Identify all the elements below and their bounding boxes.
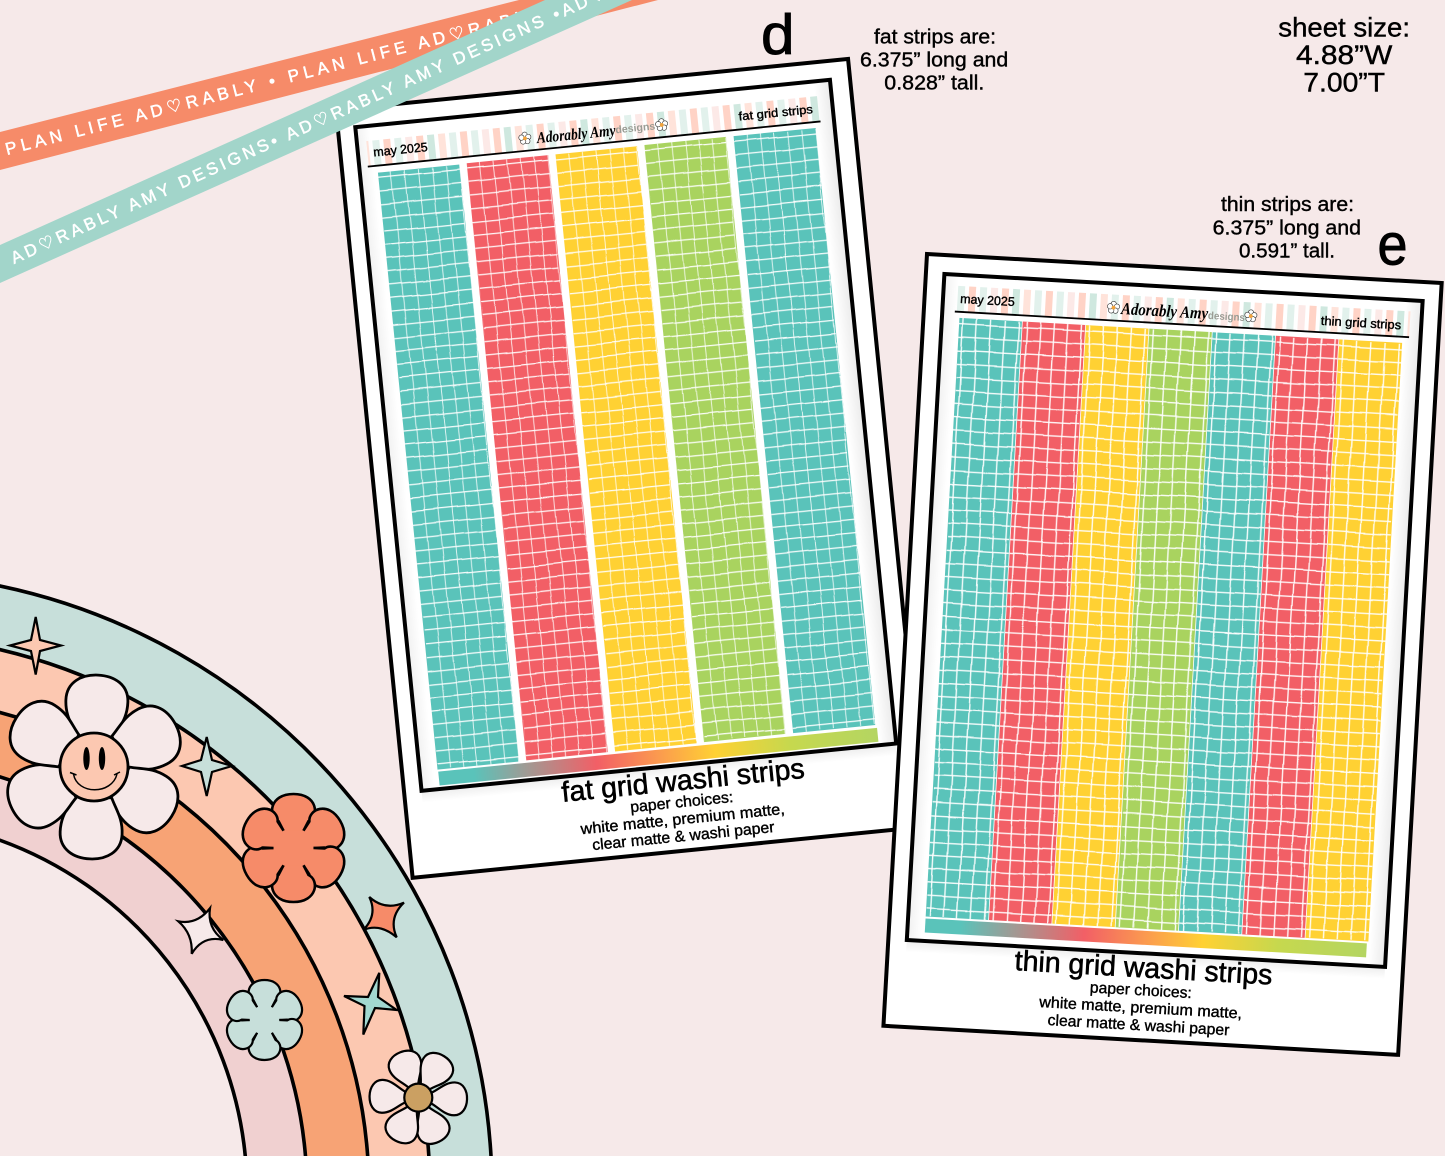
strip: teal bbox=[378, 165, 519, 770]
sheet e frame bbox=[907, 274, 1423, 967]
sheet d type label: fat grid strips bbox=[738, 102, 813, 124]
strip: green bbox=[644, 137, 786, 742]
sheet d header stripes bbox=[366, 96, 820, 166]
sheet e caption: thin grid washi strips bbox=[1014, 945, 1273, 992]
icon: smiley flower bbox=[0, 674, 190, 860]
sheet d caption: paper choices: bbox=[629, 789, 734, 816]
sheet size note bbox=[1278, 13, 1410, 98]
icon: peach sparkle bbox=[10, 617, 61, 674]
strip: yellow bbox=[555, 146, 697, 751]
sheet e month label: may 2025 bbox=[960, 292, 1015, 309]
strip: green bbox=[1116, 329, 1212, 931]
sheet d logo bbox=[518, 117, 669, 149]
sheet e logo bbox=[1107, 298, 1257, 326]
sheet e caption bbox=[1011, 945, 1273, 1042]
sheet e caption: paper choices: bbox=[1089, 979, 1192, 1002]
strip: red bbox=[467, 155, 608, 760]
sheet d logo: Adorably Amy bbox=[535, 122, 617, 147]
sheet d caption: white matte, premium matte, bbox=[579, 801, 786, 838]
fat strips note: 6.375” long and bbox=[860, 49, 1008, 72]
strip: red 2 bbox=[1242, 336, 1338, 938]
strip: yellow 1 bbox=[1052, 325, 1149, 927]
sheet size note: 4.88”W bbox=[1296, 40, 1392, 70]
sheet d month label: may 2025 bbox=[373, 140, 428, 159]
sheet e logo: designs bbox=[1208, 310, 1245, 324]
strip: teal right bbox=[734, 128, 875, 733]
thin strips note: thin strips are: bbox=[1221, 193, 1354, 216]
ribbon: plan life adorably: PLAN LIFE AD♡RABLY • PLAN LIFE AD♡RABLY bbox=[3, 2, 545, 159]
icon: coral star bbox=[363, 897, 404, 937]
rainbow bbox=[0, 584, 492, 1156]
sheet d paper bbox=[336, 59, 925, 878]
strip: yellow 2 bbox=[1305, 339, 1402, 941]
letter e: e bbox=[1378, 212, 1408, 278]
sheet d logo: designs bbox=[615, 120, 656, 136]
thin strips note: 0.591” tall. bbox=[1239, 239, 1335, 262]
fat strips note: fat strips are: bbox=[874, 26, 996, 48]
thin strips note: 6.375” long and bbox=[1213, 216, 1361, 239]
sheet e strips bbox=[926, 318, 1402, 941]
sheet size note: sheet size: bbox=[1278, 13, 1410, 43]
sheet d grid lines bbox=[378, 128, 875, 770]
sheet d caption bbox=[560, 753, 811, 857]
strip: red 1 bbox=[989, 322, 1085, 924]
sheet e caption: clear matte & washi paper bbox=[1047, 1012, 1230, 1039]
icon: daisy bbox=[369, 1046, 468, 1149]
sheet size note: 7.00”T bbox=[1303, 68, 1385, 98]
panel: fat grid washi sheet (d) bbox=[336, 59, 925, 878]
strip: teal 1 bbox=[926, 318, 1022, 920]
sheet e grid lines bbox=[926, 318, 1402, 941]
sheet d caption: clear matte & washi paper bbox=[591, 819, 775, 854]
sheet d gradient bar bbox=[438, 728, 878, 786]
panel: thin grid washi sheet (e) bbox=[883, 254, 1442, 1055]
fat strips note: 0.828” tall. bbox=[884, 72, 984, 94]
sheet e header stripes bbox=[955, 286, 1411, 337]
sheet d frame bbox=[355, 80, 896, 791]
sheet d caption: fat grid washi strips bbox=[560, 753, 806, 809]
sheet e gradient bar bbox=[925, 918, 1367, 957]
sheet d header rule bbox=[368, 121, 821, 168]
icon: mint star bbox=[344, 973, 397, 1034]
icon: mint sparkle bbox=[182, 737, 232, 796]
strip: teal 2 bbox=[1179, 332, 1275, 934]
sheet e caption: white matte, premium matte, bbox=[1038, 994, 1242, 1022]
icon: coral flower bbox=[236, 794, 351, 902]
thin strips note bbox=[1213, 193, 1361, 262]
icon: white star bbox=[178, 908, 223, 954]
fat strips note bbox=[860, 26, 1008, 94]
sheet e type label: thin grid strips bbox=[1320, 314, 1402, 332]
letter d: d bbox=[761, 3, 794, 67]
icon: mint flower bbox=[222, 980, 307, 1060]
sheet e paper bbox=[883, 254, 1442, 1055]
sheet e header rule bbox=[955, 311, 1409, 338]
sheet d strips bbox=[378, 128, 875, 770]
sheet d inner shadow bbox=[422, 743, 897, 803]
sheet e inner shadow bbox=[906, 940, 1385, 979]
sheet e logo: Adorably Amy bbox=[1120, 299, 1209, 323]
